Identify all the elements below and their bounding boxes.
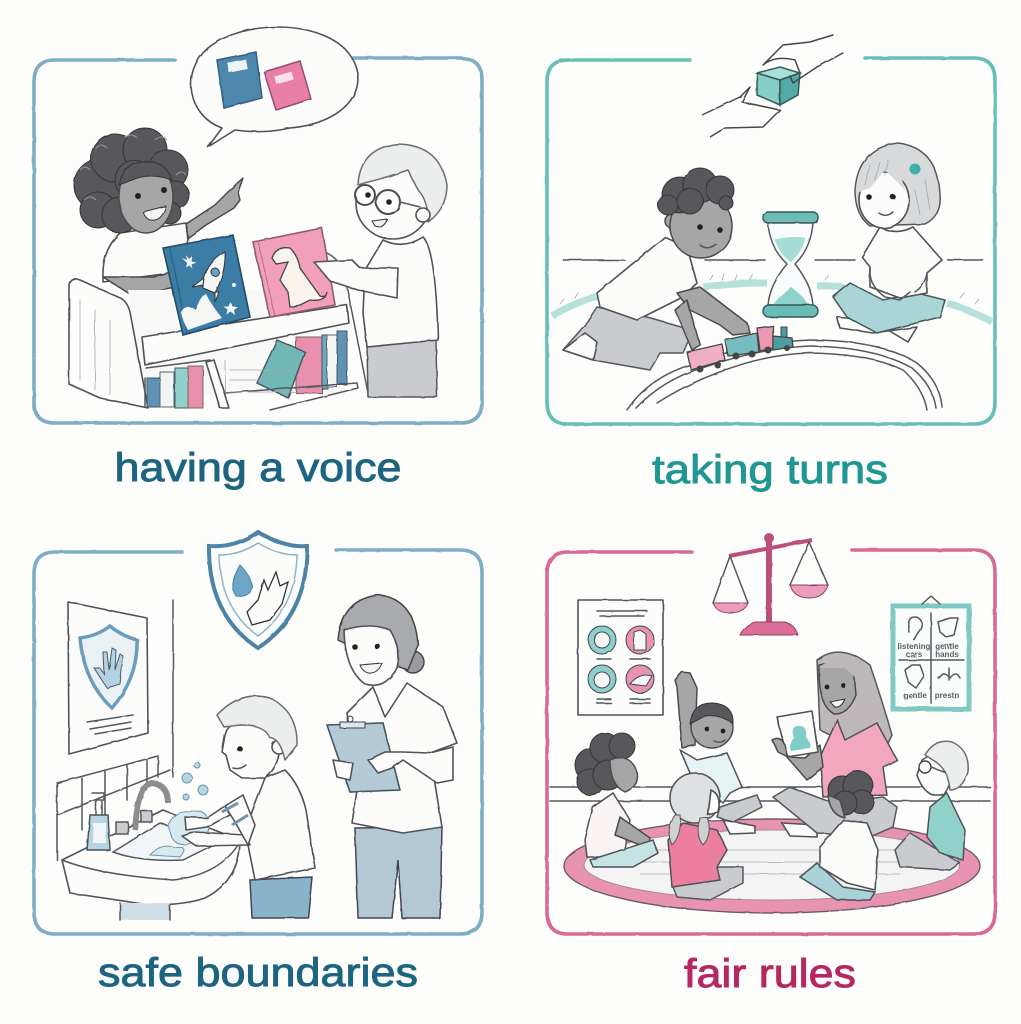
child with hair clip <box>833 143 945 342</box>
soap bubbles <box>150 762 209 857</box>
poster listening ears gentle hands: listening <box>898 642 931 651</box>
icon: shield with water drop and hand <box>209 532 307 648</box>
child seen from behind <box>800 771 878 900</box>
panel: safe boundaries <box>34 532 482 934</box>
child head <box>658 168 734 258</box>
speech bubble with books <box>191 27 358 147</box>
book with dinosaur cover <box>253 228 335 317</box>
poster with hand shield <box>68 602 148 754</box>
teacher head <box>338 595 424 685</box>
panel border <box>34 58 482 423</box>
poster listening ears gentle hands: hands <box>935 650 959 659</box>
child with pigtails <box>668 773 743 900</box>
child with glasses in teal shirt <box>895 741 968 870</box>
panel border <box>547 550 995 934</box>
panel: fair rules <box>547 533 995 934</box>
icon: toy train <box>687 326 793 372</box>
wall tiles and corner <box>57 600 173 860</box>
child raising hand <box>675 672 762 834</box>
child with train <box>563 168 750 370</box>
teacher with clipboard <box>327 595 457 918</box>
curly hair <box>74 128 189 233</box>
poster listening ears gentle hands <box>893 596 969 709</box>
icon: hands passing cube <box>702 35 843 137</box>
clipboard <box>327 716 400 792</box>
panel: taking turns <box>547 35 995 424</box>
icon: balance scales <box>713 533 828 635</box>
panel border <box>34 550 482 934</box>
label: fair rules: fair rules <box>684 952 856 996</box>
icon: pink book <box>264 61 311 110</box>
icon: blue book <box>217 52 262 108</box>
child with curly hair <box>575 733 658 867</box>
poster listening ears gentle hands: cars <box>906 650 923 659</box>
child head <box>355 144 447 239</box>
sink with soap and faucet <box>62 783 240 920</box>
child with glasses <box>314 144 447 397</box>
book with rocket cover <box>163 235 250 335</box>
floor, rug and grass <box>552 260 992 322</box>
track <box>627 340 942 410</box>
icon: hourglass <box>763 212 818 317</box>
label: taking turns: taking turns <box>652 448 888 492</box>
panel border <box>547 58 995 424</box>
child with curly hair pointing <box>74 128 243 296</box>
panel: having a voice <box>34 27 482 423</box>
label: safe boundaries: safe boundaries <box>98 951 418 995</box>
child head <box>217 696 297 778</box>
lower right books <box>257 331 347 398</box>
child head <box>855 143 940 228</box>
lower left books <box>147 360 229 408</box>
poster listening ears gentle hands: gentle <box>935 642 959 651</box>
child washing hands <box>182 696 315 918</box>
teacher with card <box>772 652 897 837</box>
poster with four icons <box>578 600 663 715</box>
bookshelf <box>69 253 368 410</box>
label: having a voice: having a voice <box>114 446 402 490</box>
poster listening ears gentle hands: prestn <box>935 691 959 700</box>
poster listening ears gentle hands: gentle <box>903 691 927 700</box>
round rug <box>550 787 990 913</box>
